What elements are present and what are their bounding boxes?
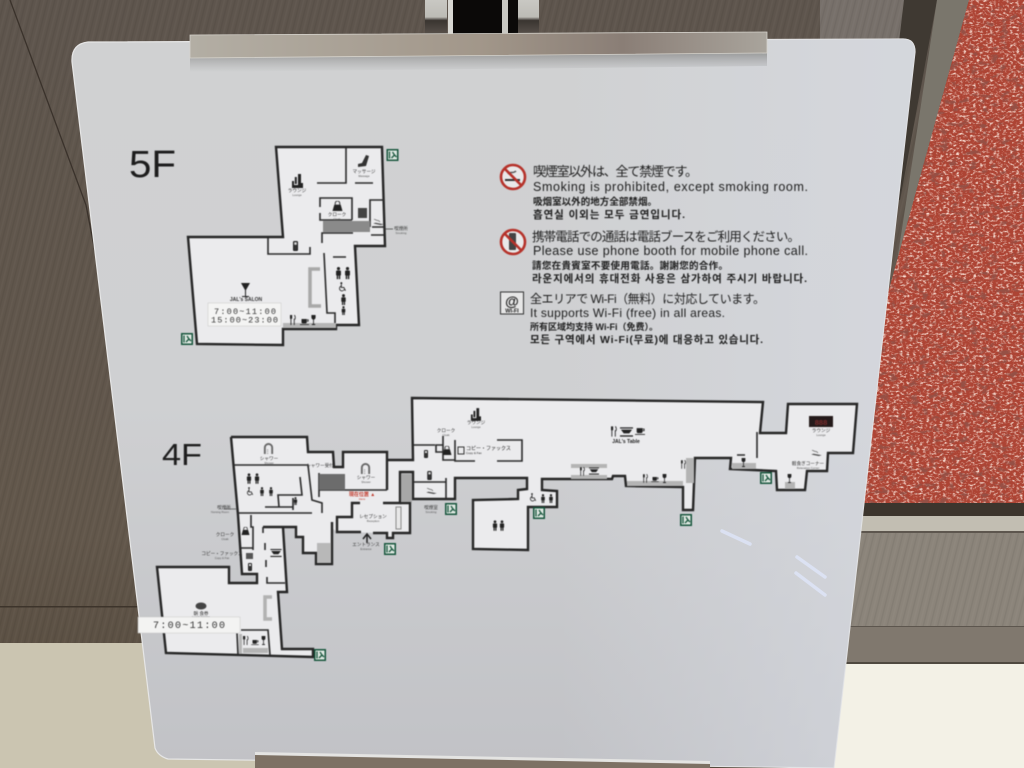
icon: cloak: クローク [328, 212, 346, 218]
current location marker: 現在位置 ▲ [349, 491, 375, 498]
label: relaxation corner: Relaxation Corner [797, 466, 819, 470]
icon: lounge center [467, 408, 486, 429]
label: copy fax center [458, 446, 511, 455]
icon: JAL's Salon: JAL's SALON [230, 297, 263, 303]
elevator marker [310, 269, 321, 306]
icon: lounge center: ラウンジ [467, 419, 486, 426]
upper right wood and columns [820, 0, 910, 44]
rule 3: Wi-Fi notice: 所有区域均支持 Wi-Fi（免费）。 [530, 321, 658, 332]
rule 1: no smoking notice: 吸烟室以外的地方全部禁烟。 [533, 196, 657, 208]
icon: restrooms [336, 267, 350, 315]
icon: lounge: ラウンジ [288, 187, 307, 194]
icon: salon restaurant: 朝 食券 [193, 610, 209, 617]
rule 1: no smoking notice: 흡연실 이외는 모두 금연입니다. [533, 208, 685, 221]
icon: smoking room: Smoking [426, 510, 437, 514]
reception counter [396, 507, 401, 529]
icon: Wi-Fi: @ [505, 293, 519, 309]
label: relaxation corner [792, 450, 824, 470]
counter strip [283, 323, 336, 328]
icon: Wi-Fi [500, 292, 524, 314]
label: cloak: Cloak [221, 537, 229, 541]
icon: salon restaurant [192, 602, 210, 619]
counters [239, 458, 795, 654]
icon: dining 4F lower [243, 636, 265, 645]
label: smoking room west: Nursing Room [211, 510, 230, 514]
rule 2: mobile phone notice [501, 229, 808, 285]
icon: cloak center: Cloak [442, 433, 450, 437]
lower right wall bands [830, 503, 1024, 516]
elevator door hardware [425, 0, 447, 34]
icon: no smoking [501, 165, 525, 189]
time label 5F [208, 303, 281, 326]
icon: Wi-Fi: WI-FI [505, 308, 519, 314]
icon: smoking area [373, 219, 408, 235]
rule 2: mobile phone notice: 携帯電話での通話は電話ブースをご利用ください。 [532, 229, 800, 244]
top metal bracket [190, 32, 767, 58]
time label 5F: 15:00~23:00 [211, 316, 278, 326]
label: entrance: Entrance [360, 547, 372, 551]
exit signs 4F [314, 472, 772, 661]
icon: JAL's Table: JAL's Table [612, 439, 640, 445]
bottom metal bracket [255, 752, 710, 768]
rule 3: Wi-Fi notice: 모든 구역에서 Wi-Fi(무료)에 대응하고 있습니다. [530, 333, 763, 346]
label: copy and fax: コピー・ファックス [201, 551, 243, 557]
sign board panel [72, 39, 915, 768]
icon: lounge: Lounge [292, 193, 302, 197]
label: smoking room west: 喫煙所 [217, 504, 231, 511]
time label 4F: 7:00~11:00 [153, 621, 225, 632]
icon: no phone [501, 230, 525, 254]
time label 4F [138, 617, 240, 633]
icons: shower rooms: シャワー受付 [306, 462, 334, 469]
icon: JAL's Table [611, 426, 645, 445]
restrooms room [493, 520, 504, 531]
icon: copy [358, 208, 367, 218]
label: reception: レセプション [359, 514, 387, 520]
rule 2: mobile phone notice: 請您在貴賓室不要使用電話。謝謝您的合作。 [532, 260, 728, 272]
label: cloak [216, 527, 250, 541]
icon: smoking area: 喫煙所 [394, 225, 408, 232]
icon: massage [353, 155, 376, 178]
current location marker: Here [359, 497, 366, 501]
icon: dining [290, 315, 316, 325]
icon: smoking room: 喫煙室 [424, 504, 438, 511]
label: smoking room west [211, 504, 236, 514]
exit signs [181, 149, 398, 345]
icon: cloak [328, 201, 346, 221]
rule 1: no smoking notice: Smoking is prohibited, except smoking room. [533, 180, 808, 194]
rule 2: mobile phone notice: Please use phone booth for mobile phone call. [533, 244, 808, 258]
floor map: 5F [181, 147, 408, 345]
label: copy fax center: コピー・ファックス [466, 446, 511, 452]
label: entrance [352, 534, 380, 551]
icon: massage: Massage [358, 174, 370, 178]
icon: lounge east with display: Lounge [816, 433, 826, 437]
icon: smoking room [424, 471, 438, 514]
icon: phone booth [293, 241, 298, 251]
icon: lounge east with display: 888 [815, 418, 827, 427]
rule 1: no smoking notice: 喫煙室以外は、全て禁煙です。 [533, 164, 698, 179]
label: reception: Reception [367, 519, 380, 523]
icons: restroom cluster [247, 473, 297, 505]
label: entrance: エントランス [352, 542, 380, 548]
icon: lounge east with display [809, 416, 833, 437]
rule 2: mobile phone notice: 라운지에서의 휴대전화 사용은 삼가하여 주시기 바랍니다. [532, 272, 807, 285]
icons: shower rooms: シャワー [357, 475, 376, 480]
stairs [323, 221, 370, 232]
red textile wall panel [864, 0, 1024, 503]
label: relaxation corner: 軽食ぎコーナー [792, 460, 824, 467]
icons: shower rooms: シャワー [260, 456, 279, 461]
icon: salon restaurant: Lunch Service [192, 615, 210, 619]
label: copy and fax [201, 551, 253, 571]
stairs 4F [317, 543, 331, 563]
grey service block [319, 474, 345, 490]
accessible toilets [530, 493, 553, 503]
floor label 4F: 4F [162, 437, 202, 472]
current location marker [349, 491, 375, 501]
icon: buffet counters [580, 458, 791, 483]
icon: cloak center: クローク [437, 428, 455, 434]
rule 3: Wi-Fi notice [500, 291, 765, 346]
icons: shower rooms: Shower [361, 480, 371, 484]
panel reflections [722, 531, 825, 595]
icon: bowl area [270, 549, 282, 557]
rule 3: Wi-Fi notice: 全エリアで Wi-Fi（無料）に対応しています。 [530, 291, 765, 306]
floor label 5F: 5F [129, 144, 176, 186]
icon: cloak: Cloak [333, 217, 341, 221]
icon: lounge east with display: ラウンジ [812, 427, 831, 434]
rule 1: no smoking notice [501, 164, 808, 221]
label: copy fax center: Copy & Fax [466, 451, 482, 455]
icon: lounge center: Lounge [471, 425, 481, 429]
bracket shadow [190, 53, 767, 72]
icon: cloak center [424, 428, 455, 458]
icon: lounge [288, 174, 307, 197]
label: reception [359, 514, 387, 523]
rule 3: Wi-Fi notice: It supports Wi-Fi (free) in all areas. [530, 306, 725, 320]
interior walls [234, 432, 757, 655]
icon: JAL's Salon [230, 283, 263, 303]
icons: shower rooms [260, 444, 376, 484]
icon: smoking area: Smoking [396, 231, 407, 235]
label: copy and fax: Copy & Fax [215, 556, 230, 560]
time label 5F: 7:00~11:00 [214, 307, 276, 317]
icons: shower rooms: Shower [264, 461, 274, 465]
floor map: 4F [157, 398, 857, 661]
icon: massage: マッサージ [353, 169, 376, 175]
label: cloak: クローク [216, 532, 234, 538]
